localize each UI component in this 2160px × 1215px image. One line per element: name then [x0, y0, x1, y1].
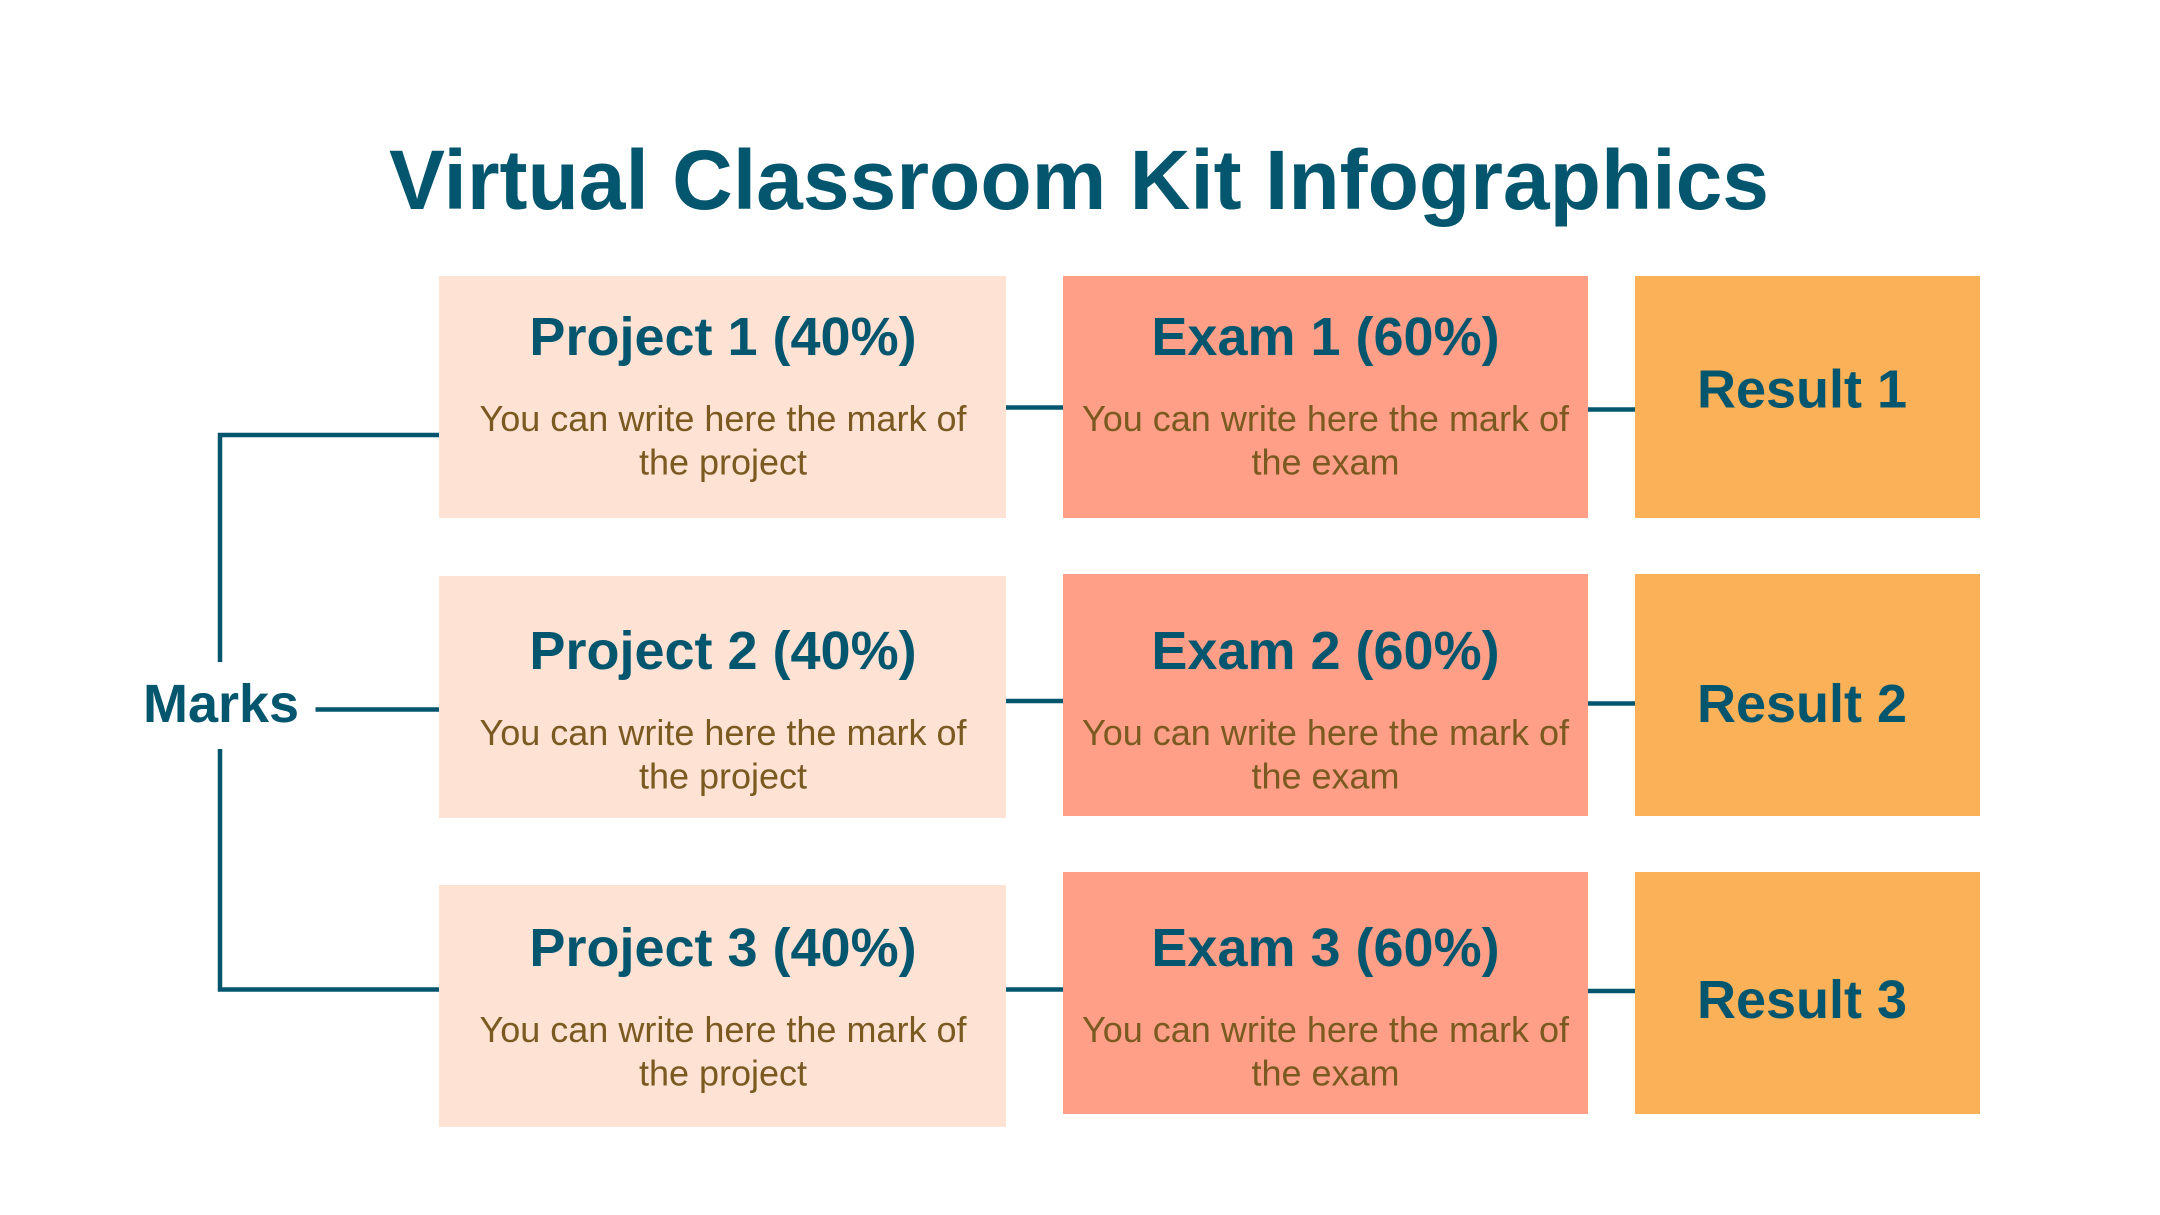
connectors: exam to result — [1588, 410, 1635, 991]
panel: exam 3: the exam — [1251, 1052, 1400, 1094]
panel: project 1: Project 1 (40%) — [529, 307, 917, 367]
panel: exam 1 — [1063, 276, 1588, 518]
panel: project 2 — [439, 576, 1006, 818]
panel: exam 3 — [1063, 872, 1588, 1114]
panel: exam 1: You can write here the mark of — [1082, 398, 1570, 439]
panel: result 2: Result 2 — [1697, 674, 1907, 734]
panel: exam 3: You can write here the mark of — [1082, 1009, 1570, 1050]
panel: exam 2 — [1063, 574, 1588, 816]
connectors: project to exam — [1006, 408, 1063, 990]
panel: project 3: You can write here the mark of — [480, 1009, 967, 1050]
title: Virtual Classroom Kit Infographics — [389, 133, 1769, 227]
panel: result 3 — [1635, 872, 1980, 1114]
panel: exam 2: You can write here the mark of — [1082, 712, 1570, 753]
panel: exam 3: Exam 3 (60%) — [1151, 918, 1500, 978]
panel: project 1 — [439, 276, 1006, 518]
panel: project 2: the project — [639, 756, 807, 796]
panel: result 3: Result 3 — [1697, 970, 1907, 1030]
panel: project 3 — [439, 885, 1006, 1127]
connector: marks bracket — [220, 435, 439, 990]
panel: exam 1: Exam 1 (60%) — [1151, 307, 1500, 367]
panel: result 1: Result 1 — [1697, 360, 1907, 420]
panel: project 3: Project 3 (40%) — [529, 918, 917, 978]
panel: project 3: the project — [639, 1052, 807, 1094]
panel: project 2: You can write here the mark of — [480, 712, 967, 753]
panel: project 1: the project — [639, 442, 807, 482]
panel: exam 2: the exam — [1251, 756, 1400, 796]
panel: result 1 — [1635, 276, 1980, 518]
panel: exam 2: Exam 2 (60%) — [1151, 621, 1500, 681]
label: marks: Marks — [143, 674, 299, 734]
panel: result 2 — [1635, 574, 1980, 816]
panel: project 1: You can write here the mark of — [480, 398, 967, 439]
panel: project 2: Project 2 (40%) — [529, 621, 917, 681]
panel: exam 1: the exam — [1251, 442, 1400, 482]
